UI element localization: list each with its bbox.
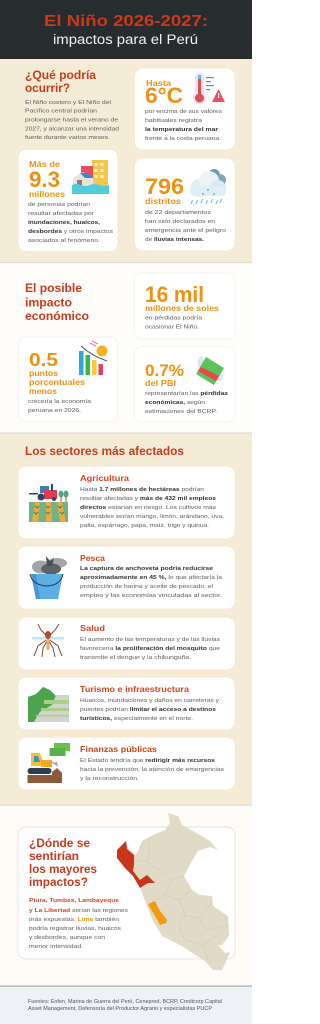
panel: 796 distritos [134,158,235,251]
stat: 16 mil [145,282,204,307]
panel: 0.5 puntos [18,337,118,422]
description: frente a la costa peruana. [145,136,221,142]
icon: flooded houses [72,160,109,194]
panel: 16 mil millones: millones de soles [145,304,220,313]
heading: Salud [80,624,105,633]
description: Huaicos, inundaciones y daños en carreteras y [80,698,219,704]
panel: turismo [18,677,235,730]
description: resultar afectadas y más de 432 mil empleos [80,496,217,502]
icon: bucket of fish [30,556,67,599]
description [145,109,222,142]
description: puentes podrían limitar el acceso a destinos [80,707,217,713]
background: beige section three [0,433,252,805]
panel: 0.5 puntos: porcentuales [29,378,86,387]
description: crecería la economía [28,399,92,405]
paragraph [25,100,119,141]
description: palta, espárrago, papa, maíz, trigo y quinua. [80,523,209,529]
stat: Más de [29,160,61,169]
heading: ¿Qué podría [25,68,96,82]
panel: 0.7% del PBI: del PBI [145,379,176,388]
description [28,202,113,244]
heading: impacto económico: económico [25,309,89,323]
description: Piura, Tumbes, Lambayeque [29,898,120,904]
description: El Estado tendría que redirigir más recursos [80,758,216,764]
description [80,566,223,599]
description: resultar afectadas por [28,211,94,217]
heading: Pesca [80,554,106,563]
description: vulnerables serían mango, limón, arándano, uva, [80,514,224,520]
heading: los mayores [29,862,97,876]
stat: 796 [145,174,184,199]
description: menor intensidad. [29,944,83,950]
region: Lima [148,901,167,925]
footer: sources: Fuentes: Enfen, Marina de Guerra del Perú, Cenepred, BCRP, Credicorp Capital [28,999,222,1005]
heading: sentirían [29,849,79,863]
description: ocasionar El Niño. [145,324,199,330]
icon: tractor in field [29,484,68,522]
description: de personas podrían [28,202,90,208]
heading: ¿Dónde se [29,836,90,850]
panel: 9.3 millones: millones [29,190,66,199]
icon: terraces [28,687,69,722]
icon: mosquito [32,624,64,657]
description: asociados al fenómeno. [28,238,100,244]
heading: impacto económico: El posible [25,281,82,295]
description: representarían las pérdidas [145,391,229,397]
icon: thermometer and warning [193,73,225,104]
description: aproximadamente en 45 %, lo que afectaría la [80,575,223,581]
description: empleo y las economías vinculadas al sector. [80,593,222,599]
description: y La Libertad serían las regiones [29,908,128,914]
description: producción de harina y aceite de pescado, el [80,584,213,590]
panel: 16 mil millones [134,273,235,339]
description: habituales registra [145,118,203,124]
description: han sido declarados en [145,219,215,225]
description: más expuestas. Lima también [29,917,119,923]
panel: 796 distritos: distritos [145,197,182,206]
description: la temperatura del mar [145,127,219,133]
description: favorecería la proliferación del mosquito que [80,646,221,652]
description: en pérdidas podría [145,316,203,322]
description: desbordes y otros impactos [28,229,113,235]
description: podría registrar lluvias, huaicos [29,926,121,932]
description: La captura de anchoveta podría reducirse [80,566,214,572]
heading: Finanzas públicas [80,745,158,754]
heading: sectores: Los sectores más afectados [25,444,184,458]
panel: salud [18,617,235,670]
description [80,637,221,661]
description: hacia la prevención, la atención de emergencias [80,767,224,773]
description: El aumento de las temperaturas y de las lluvias [80,637,220,643]
stat: 0.7% [145,361,184,380]
description [80,758,224,782]
stat: 0.5 [29,349,58,370]
description [80,487,224,529]
title: El Niño 2026-2027: [44,13,208,30]
background: beige section one [0,59,252,263]
description: Hasta 1.7 millones de hectáreas podrían [80,487,204,493]
description: turísticos, especialmente en el norte. [80,716,193,722]
heading: impacto económico [25,281,89,323]
paragraph: fuerte durante varios meses. [25,135,110,141]
paragraph: 2027, y alcanzar una intensidad [25,126,119,132]
footer: sources [0,986,252,1024]
icon: excavator and money [28,743,70,783]
description: inundaciones, huaicos, [28,220,100,226]
heading: impacto económico: impacto [25,296,72,310]
description: de lluvias intensas. [145,237,204,243]
icon: falling bar chart [79,341,108,375]
description: y la reconstrucción. [80,776,139,782]
description: directos estarían en riesgo. Los cultivos más [80,505,216,511]
text block: qué podría ocurrir [25,68,119,141]
text block: qué podría ocurrir: ocurrir? [25,81,70,95]
description: de 22 departamentos [145,210,211,216]
panel: 0.5 puntos: menos [29,387,58,396]
description: peruana en 2026. [28,408,81,414]
icon: flying money [196,356,224,385]
paragraph: Pacífico central podrían [25,109,97,115]
description [80,698,219,722]
heading: Agricultura [80,474,130,483]
panel: hasta 6°C: 6°C [145,83,183,108]
description [28,399,92,414]
panel: hasta 6°C [134,68,235,150]
map of Perú [117,813,230,970]
header [0,0,252,59]
panel: finanzas [18,737,235,790]
description [29,898,128,950]
panel: pesca [18,546,235,609]
description: transmite el dengue y la chikunguña. [80,655,191,661]
heading: impactos? [29,875,88,889]
footer: sources: Asset Management, Defensoría del Productor Agrario y especialistas PUCP [28,1006,212,1012]
paragraph: prolongarse hasta el verano de [25,118,119,124]
heading [29,836,97,889]
panel: dónde se sentirían [18,813,235,970]
panel: 9.3 millones: 9.3 [29,167,60,192]
panel: 0.7% del PBI [134,346,235,422]
background: white section two [0,263,252,433]
description: emergencia ante el peligro [145,228,227,234]
paragraph: El Niño costero y El Niño del [25,100,111,106]
description: por encima de sus valores [145,109,222,115]
subtitle: impactos para el Perú [53,32,198,47]
stat: Hasta [146,79,172,88]
panel: 0.5 puntos: puntos [29,369,59,378]
region: Piura, Tumbes, Lambayeque, La Libertad [117,841,155,888]
background: white map section [0,805,252,986]
description: y desbordes, aunque con [29,935,105,941]
panel: 9.3 millones [18,150,118,252]
description: estimaciones del BCRP. [145,409,217,415]
heading: Turismo e infraestructura [80,685,190,694]
panel: agricultura [18,466,235,539]
description: económicas, según [145,400,205,406]
icon: rain cloud [190,169,226,204]
description [145,391,229,415]
description [145,316,203,330]
description [145,210,227,243]
